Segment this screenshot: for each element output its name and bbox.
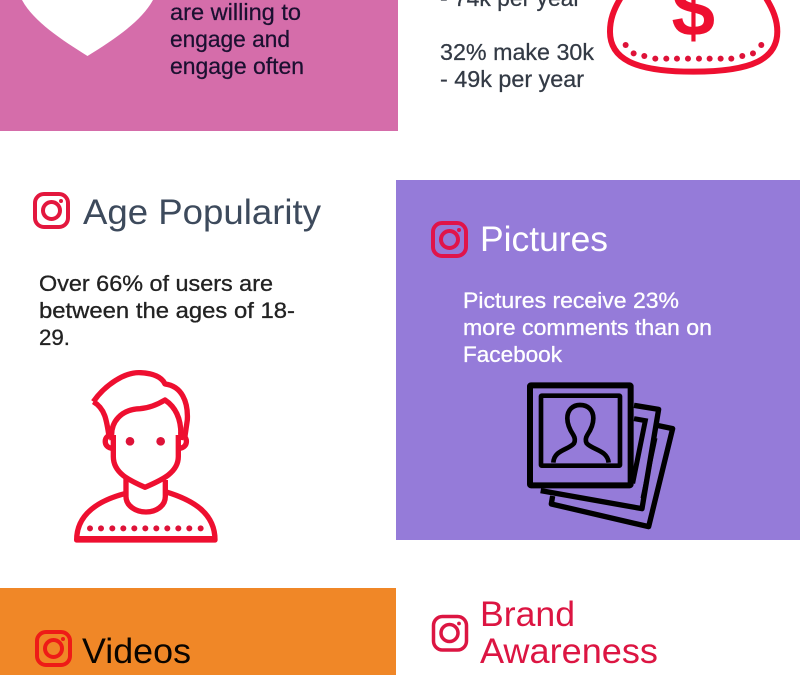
panel: videos (orange): [0, 588, 396, 675]
heading: brand awareness: [480, 595, 658, 671]
text: engagement description: engage often: [170, 53, 304, 79]
text: pictures statistic: [463, 288, 712, 367]
panel: pictures (purple): [396, 180, 800, 540]
icon: instagram logo: [35, 194, 68, 227]
text: age statistic: between the ages of 18-: [39, 298, 295, 323]
heading: brand awareness: Awareness: [480, 632, 658, 671]
icon: instagram logo: [433, 223, 466, 256]
icon: instagram logo: [37, 632, 70, 665]
heading: age popularity: Age Popularity: [83, 193, 322, 232]
text: engagement description: [170, 0, 304, 79]
text: income statistics: 32% make 30k: [440, 39, 595, 65]
text: pictures statistic: Pictures receive 23%: [463, 288, 679, 313]
icon: instagram logo: [434, 616, 466, 650]
panel: engagement (pink): [0, 0, 398, 131]
icon: young man: [75, 373, 217, 540]
text: engagement description: engage and: [170, 26, 290, 52]
panel: income: [440, 0, 777, 92]
panel: age popularity: [35, 193, 322, 540]
heading: pictures: Pictures: [480, 220, 608, 259]
text: income statistics: - 49k per year: [440, 66, 584, 92]
panel: brand awareness: [434, 595, 658, 671]
text: pictures statistic: more comments than on: [463, 315, 712, 340]
icon: stack of photos: [530, 385, 673, 527]
icon: white heart: [22, 0, 153, 56]
text: age statistic: Over 66% of users are: [39, 271, 273, 296]
text: pictures statistic: Facebook: [463, 342, 563, 367]
text: income statistics: [440, 0, 595, 92]
text: age statistic: [39, 271, 295, 350]
heading: videos: Videos: [82, 632, 191, 671]
text: age statistic: 29.: [39, 325, 70, 350]
heading: brand awareness: Brand: [480, 595, 575, 634]
icon: money bag: [610, 0, 777, 72]
